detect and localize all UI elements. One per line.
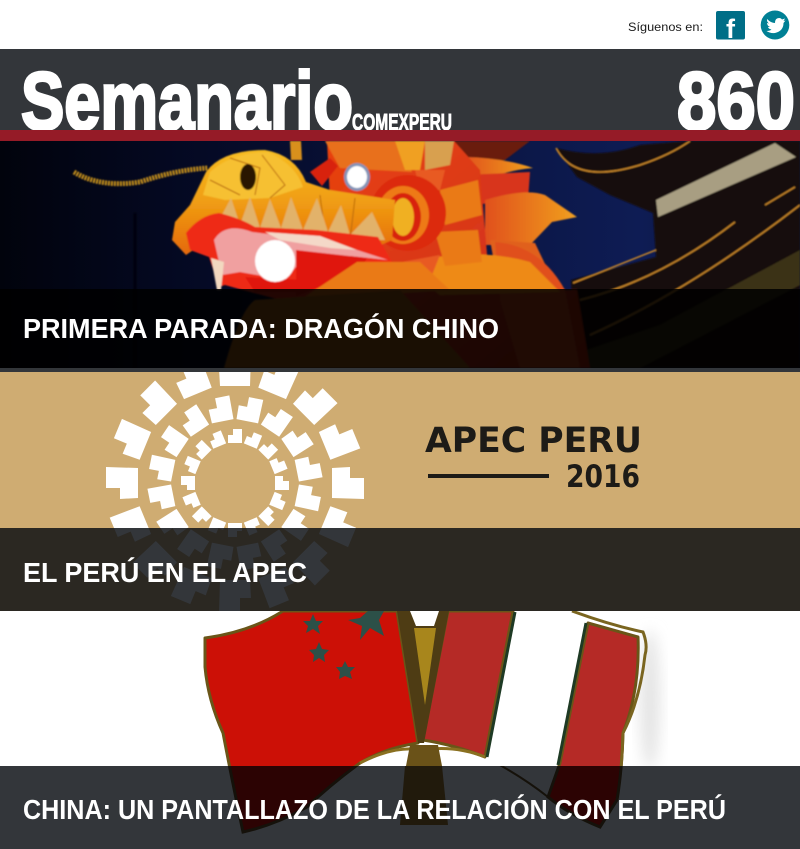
story title band — [0, 766, 800, 849]
glowing ball — [255, 240, 295, 282]
teeth row — [222, 197, 385, 240]
panel: APEC story — [0, 354, 800, 612]
top white bar with social links — [0, 0, 800, 49]
story title band — [0, 528, 800, 611]
lower body — [308, 260, 448, 296]
icon: facebook: f — [726, 14, 736, 44]
masthead — [0, 49, 800, 147]
icon: twitter — [761, 10, 789, 40]
photo: chinese dragon lantern — [0, 141, 800, 368]
story heading: EL PERÚ EN EL APEC — [23, 557, 307, 588]
dark upper body behind crest — [454, 141, 530, 162]
APEC wordmark: 2016 — [566, 459, 640, 495]
APEC logo rosette — [106, 372, 364, 528]
main body — [327, 141, 590, 368]
head — [172, 150, 395, 255]
pin clasp — [397, 611, 449, 743]
crest — [325, 141, 412, 172]
story title band — [0, 289, 800, 368]
story heading: PRIMERA PARADA: DRAGÓN CHINO — [23, 313, 499, 344]
APEC wordmark — [425, 421, 642, 495]
eye — [344, 163, 370, 191]
publication title: Semanario — [21, 56, 353, 147]
panel: China Peru story — [0, 611, 800, 849]
red ear ring — [370, 175, 446, 251]
APEC wordmark: APEC PERU — [425, 421, 642, 461]
flags pin — [204, 611, 664, 766]
building — [556, 141, 800, 368]
icon: facebook — [716, 11, 745, 44]
red band — [0, 130, 800, 141]
panel: dragon story — [0, 141, 800, 368]
publisher name: COMEXPERU — [352, 109, 452, 135]
story heading: CHINA: UN PANTALLAZO DE LA RELACIÓN CON EL PERÚ — [23, 794, 726, 825]
fins — [468, 156, 534, 176]
stars — [303, 611, 384, 679]
mouth — [186, 213, 392, 305]
follow us label: Síguenos en: — [628, 22, 703, 34]
divider band — [0, 368, 800, 372]
